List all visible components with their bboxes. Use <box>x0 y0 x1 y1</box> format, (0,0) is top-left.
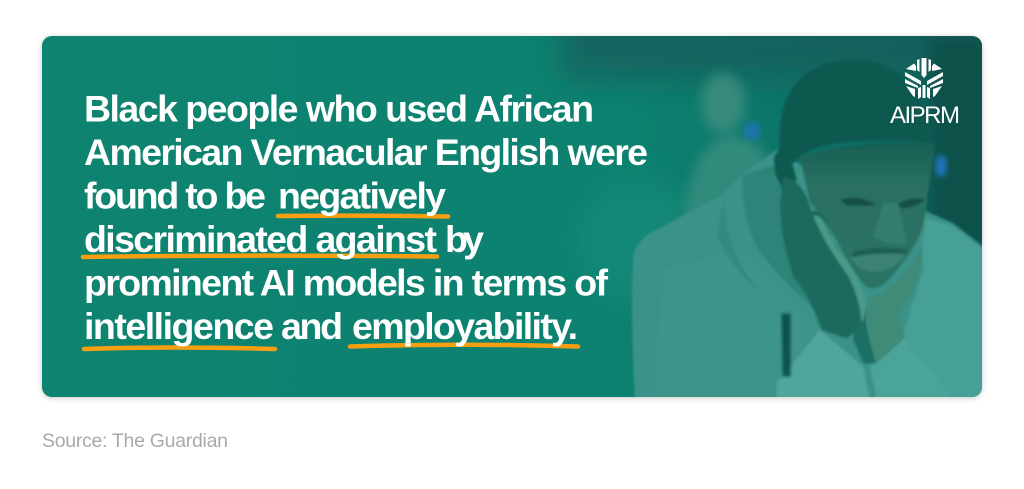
headline: American Vernacular English were <box>84 131 648 173</box>
headline: prominent AI models in terms of <box>84 262 608 304</box>
hoodie <box>632 150 983 400</box>
panel: teal card with photo <box>42 10 1020 400</box>
headline: discriminated against <box>84 218 438 260</box>
logo wordmark: AIPRM <box>890 102 960 129</box>
headline: and <box>281 305 343 347</box>
person, drawn in a 3x coordinate space <box>632 59 983 400</box>
headline: Black people who used African <box>84 88 594 130</box>
logo: AIPRM <box>890 58 960 129</box>
source note: Source: The Guardian <box>42 430 228 452</box>
headline <box>84 88 648 347</box>
headline: intelligence <box>84 305 274 347</box>
head and hair <box>774 59 935 288</box>
card background <box>42 36 982 397</box>
blurred classroom background <box>560 10 1020 300</box>
photo: student resting head on hands <box>560 10 1020 400</box>
orange underlines <box>83 216 578 349</box>
headline: found to be <box>84 174 266 216</box>
headline: employability. <box>352 305 578 347</box>
hands on cheeks <box>780 177 924 363</box>
headline: by <box>445 218 484 260</box>
headline: negatively <box>278 174 446 216</box>
icon: hexagon mark <box>905 58 943 99</box>
